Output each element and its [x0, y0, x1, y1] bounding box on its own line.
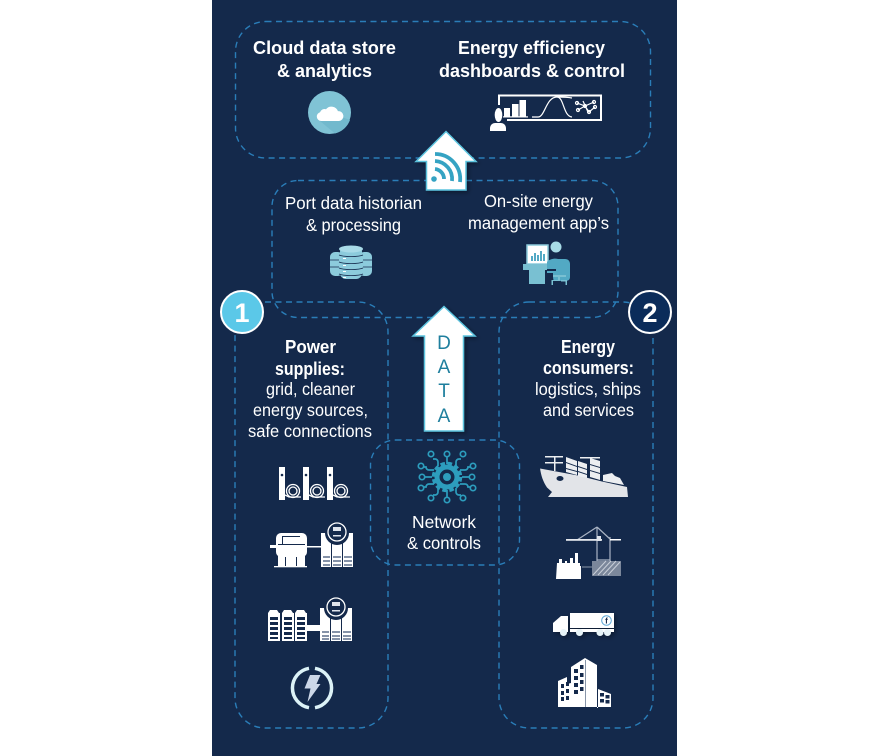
text: port data historian: Port data historian — [285, 193, 422, 213]
panel: cloud and dashboards — [236, 22, 650, 158]
text: power supplies: Power — [285, 336, 336, 357]
text: network and controls: & controls — [407, 533, 481, 553]
icon: person at desk — [523, 242, 570, 285]
panel: port data and on-site apps — [272, 180, 618, 318]
icon: generator and converter — [270, 521, 353, 567]
background panel — [212, 0, 677, 756]
label: DATA: A — [438, 406, 451, 427]
icon: truck — [553, 613, 614, 636]
text: energy consumers: and services — [543, 400, 634, 420]
text: power supplies: energy sources, — [253, 400, 368, 420]
icon: container ship — [540, 456, 628, 497]
panel: energy consumers — [499, 302, 653, 728]
icon: truck: f — [605, 616, 608, 626]
text: power supplies: supplies: — [275, 358, 345, 379]
arrow: wifi uplink — [416, 132, 476, 190]
text: on-site energy apps: management app’s — [468, 213, 609, 233]
panel: network and controls — [370, 440, 520, 565]
text: energy consumers — [535, 336, 641, 420]
text: energy consumers: logistics, ships — [535, 379, 641, 399]
icon: port crane — [556, 527, 621, 579]
icon: cloud — [308, 91, 351, 134]
label: DATA — [437, 333, 451, 427]
panel: power supplies — [235, 302, 388, 728]
badge: number 2: 2 — [642, 298, 658, 328]
icon: buildings — [558, 658, 611, 708]
icon: dashboard presenter — [490, 96, 601, 133]
badge: number 2 — [629, 291, 671, 333]
icon: database — [330, 246, 372, 279]
text: energy consumers: consumers: — [543, 357, 634, 378]
text: network and controls — [407, 512, 481, 553]
icon: batteries and converter — [268, 596, 352, 641]
heading: cloud data store: Cloud data store — [253, 37, 396, 58]
badge: number 1: 1 — [234, 298, 250, 328]
text: network and controls: Network — [412, 512, 476, 532]
arrow: data uplink — [413, 306, 475, 431]
text: on-site energy apps — [468, 191, 609, 233]
text: power supplies — [248, 336, 372, 441]
text: on-site energy apps: On-site energy — [484, 191, 593, 211]
text: port data historian — [285, 193, 422, 235]
icon: network gear — [418, 451, 476, 503]
icon: cable reels — [279, 467, 350, 500]
heading: energy efficiency: Energy efficiency — [458, 37, 606, 58]
label: DATA: A — [438, 357, 451, 378]
heading: cloud analytics line: & analytics — [277, 60, 372, 81]
icon: wifi signal — [431, 154, 460, 182]
icon: power bolt ring — [292, 668, 332, 708]
text: power supplies: safe connections — [248, 421, 372, 441]
label: DATA: D — [437, 333, 451, 354]
heading: dashboards and control: dashboards & control — [439, 60, 625, 81]
text: port data historian: & processing — [306, 215, 401, 235]
label: DATA: T — [438, 381, 450, 402]
badge: number 1 — [221, 291, 263, 333]
text: energy consumers: Energy — [561, 336, 616, 357]
text: power supplies: grid, cleaner — [266, 379, 355, 399]
